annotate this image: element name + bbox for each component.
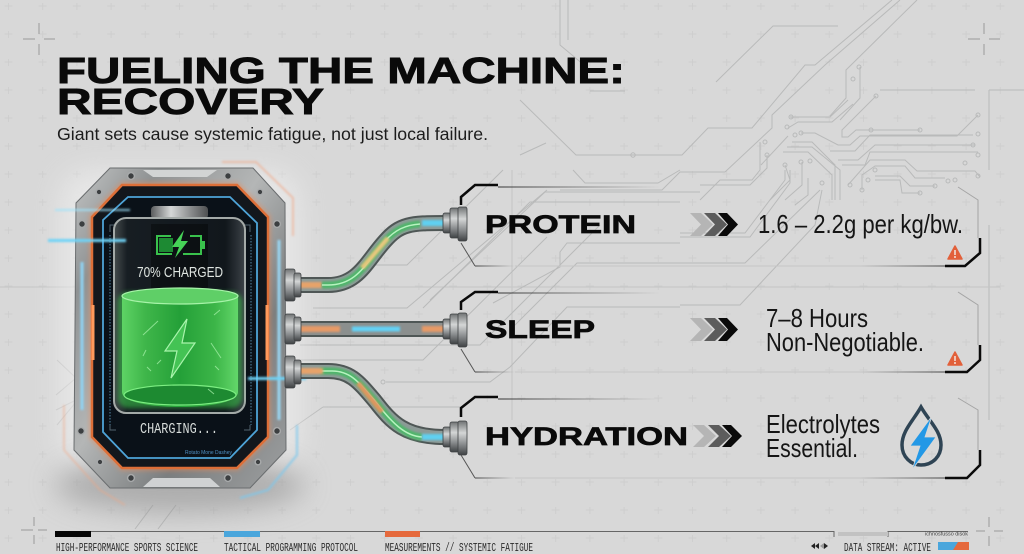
icon: water drop with bolt [902, 407, 941, 470]
liquid sparks [143, 310, 221, 394]
pipe connectors, left [285, 269, 301, 388]
orange ring [92, 185, 268, 468]
hydration value: Electrolytes [766, 409, 880, 439]
liquid lightning bolt [165, 319, 195, 378]
footer colour tabs [55, 531, 420, 537]
title: FUELING THE MACHINE: [57, 50, 625, 91]
orange ring accents [93, 305, 267, 360]
hydration chevrons [693, 425, 742, 447]
title: RECOVERY [57, 81, 324, 122]
footer gray segment [838, 532, 888, 536]
pipe: sleep [298, 321, 445, 337]
screen fine print: Rotato Mone Dashey [185, 450, 232, 456]
footer fine print: ichnosfusso disok [925, 532, 969, 538]
protein chevrons [690, 213, 738, 236]
panel: protein [461, 185, 980, 266]
liquid bottom [124, 385, 236, 405]
footer labels [56, 542, 533, 554]
green liquid glow [118, 292, 242, 408]
panel frame [461, 292, 980, 372]
metal frame [74, 168, 286, 488]
battery cap [151, 206, 208, 219]
70% charged label: 70% CHARGED [137, 264, 223, 281]
sleep value: Non-Negotiable. [766, 327, 924, 357]
orange ring glow [92, 185, 268, 468]
green liquid [122, 296, 238, 407]
protein heading: PROTEIN [485, 211, 636, 239]
footer rule [56, 532, 968, 537]
light streaks [48, 209, 306, 380]
subtitle: Giant sets cause systemic fatigue, not just local failure. [57, 124, 488, 144]
blue screen [103, 197, 257, 458]
panel frame [461, 397, 980, 478]
pipe connectors, right [443, 207, 467, 455]
screws [78, 173, 280, 481]
pipe: protein [298, 223, 445, 285]
pipe: hydration [298, 371, 445, 437]
protein value: 1.6 – 2.2g per kg/bw. [758, 209, 963, 239]
hydration value: Essential. [766, 433, 858, 463]
outer glow traces [64, 162, 297, 505]
screen rails [110, 235, 251, 425]
charging label: CHARGING... [140, 421, 218, 438]
screen inner corners [110, 225, 250, 430]
battery glass [114, 218, 245, 413]
footer arrows [811, 543, 828, 549]
pipes [285, 207, 467, 455]
sleep chevrons [690, 318, 738, 341]
frame notches [143, 170, 217, 177]
liquid top [122, 288, 238, 304]
battery icon [157, 230, 205, 258]
panel: sleep [461, 292, 980, 372]
glass highlight [151, 224, 208, 289]
battery device [48, 162, 306, 513]
title [57, 50, 625, 122]
footer [55, 531, 969, 554]
data stream status bar [938, 542, 969, 550]
hydration value [766, 409, 880, 463]
sleep heading: SLEEP [485, 316, 595, 344]
device shadow [55, 457, 305, 513]
side light strips [80, 262, 84, 410]
panel frame [461, 185, 980, 266]
device halo [60, 170, 300, 470]
sleep value: 7–8 Hours [766, 303, 868, 333]
icon: warning [948, 352, 962, 365]
panel: hydration [461, 397, 980, 478]
hydration heading: HYDRATION [485, 423, 688, 451]
icon: warning [948, 246, 962, 259]
sleep value [766, 303, 924, 357]
